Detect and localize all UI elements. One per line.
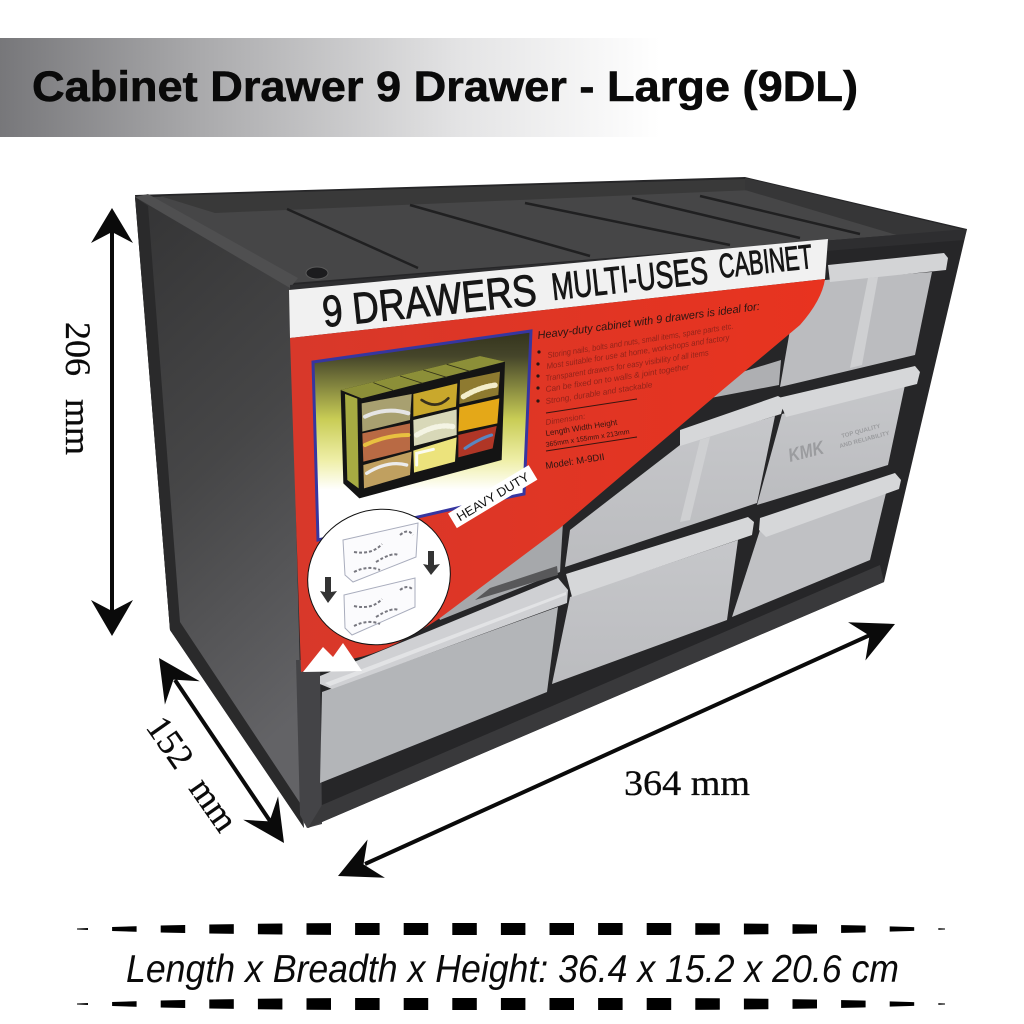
bottom lip — [308, 565, 884, 828]
length label: 364 mm — [624, 763, 750, 803]
drawer logo: KMK — [786, 438, 827, 467]
drawer logo: TOP QUALITY — [841, 424, 881, 440]
label bullet list: Strong, durable and stackable — [545, 380, 653, 406]
front left pillar — [296, 660, 322, 828]
cabinet side panel — [135, 194, 304, 828]
drawer: bottom right — [732, 473, 901, 617]
label white band — [289, 239, 828, 338]
label mountains logo — [303, 643, 362, 672]
drawer: middle right — [757, 366, 920, 505]
height label: 206 mm — [58, 322, 98, 455]
heavy duty tag — [448, 465, 537, 528]
cabinet top tray — [150, 178, 965, 283]
footer bottom dashed rule — [64, 998, 960, 1010]
label dimension block — [545, 399, 637, 472]
label heading: MULTI-USES — [549, 250, 710, 309]
mounting diagram circle — [287, 488, 471, 666]
footer top dashed rule — [64, 923, 960, 935]
label bullet list: Storing nails, bolts and nuts, small items, spare parts etc. — [547, 322, 734, 360]
heavy duty tag: HEAVY DUTY — [454, 470, 532, 524]
label bullet list: Transparent drawers for easy visibility of all items — [545, 348, 709, 383]
label bullet list: Most suitable for use at home, workshops and factory — [546, 333, 731, 371]
title: Cabinet Drawer 9 Drawer - Large (9DL) — [32, 63, 858, 111]
label model text: Model: M-9DII — [545, 452, 605, 472]
label dimension block: Length Width Height — [545, 418, 619, 438]
label dimension block: Dimension: — [545, 412, 586, 427]
label intro text: Heavy-duty cabinet with 9 drawers is ideal for: — [537, 301, 760, 342]
header banner — [0, 38, 858, 137]
cabinet — [135, 177, 967, 828]
inset photo — [313, 331, 531, 540]
depth label: 152 mm — [138, 709, 246, 839]
height dimension arrow — [91, 208, 133, 636]
drawer: middle middle — [565, 396, 785, 567]
drawer logo: AND RELIABILITY — [839, 431, 890, 450]
drawer: top right — [780, 253, 948, 387]
front rim — [290, 229, 967, 294]
label dimension block: 365mm x 155mm x 213mm — [545, 429, 630, 449]
label heading — [320, 238, 814, 337]
label red area — [290, 279, 825, 672]
label heading: 9 DRAWERS — [320, 266, 539, 337]
mini cabinet — [341, 356, 505, 498]
label heading: CABINET — [717, 238, 814, 286]
label bullet list — [536, 322, 734, 406]
drawer logo — [786, 424, 890, 467]
length dimension arrow — [329, 605, 904, 895]
cabinet body silhouette — [135, 177, 967, 828]
arrow: down right — [423, 551, 440, 575]
footer dimensions text: Length x Breadth x Height: 36.4 x 15.2 x 20.6 cm — [126, 948, 899, 991]
drawer: middle left — [430, 522, 563, 620]
label bullet list: Can be fixed on to walls & joint together — [545, 362, 690, 394]
arrow: down left — [320, 577, 337, 603]
depth dimension arrow — [142, 646, 301, 855]
drawer: bottom middle — [552, 517, 754, 684]
drawer: top middle — [700, 360, 781, 400]
drawer: bottom left — [320, 578, 568, 783]
product label — [287, 238, 828, 672]
